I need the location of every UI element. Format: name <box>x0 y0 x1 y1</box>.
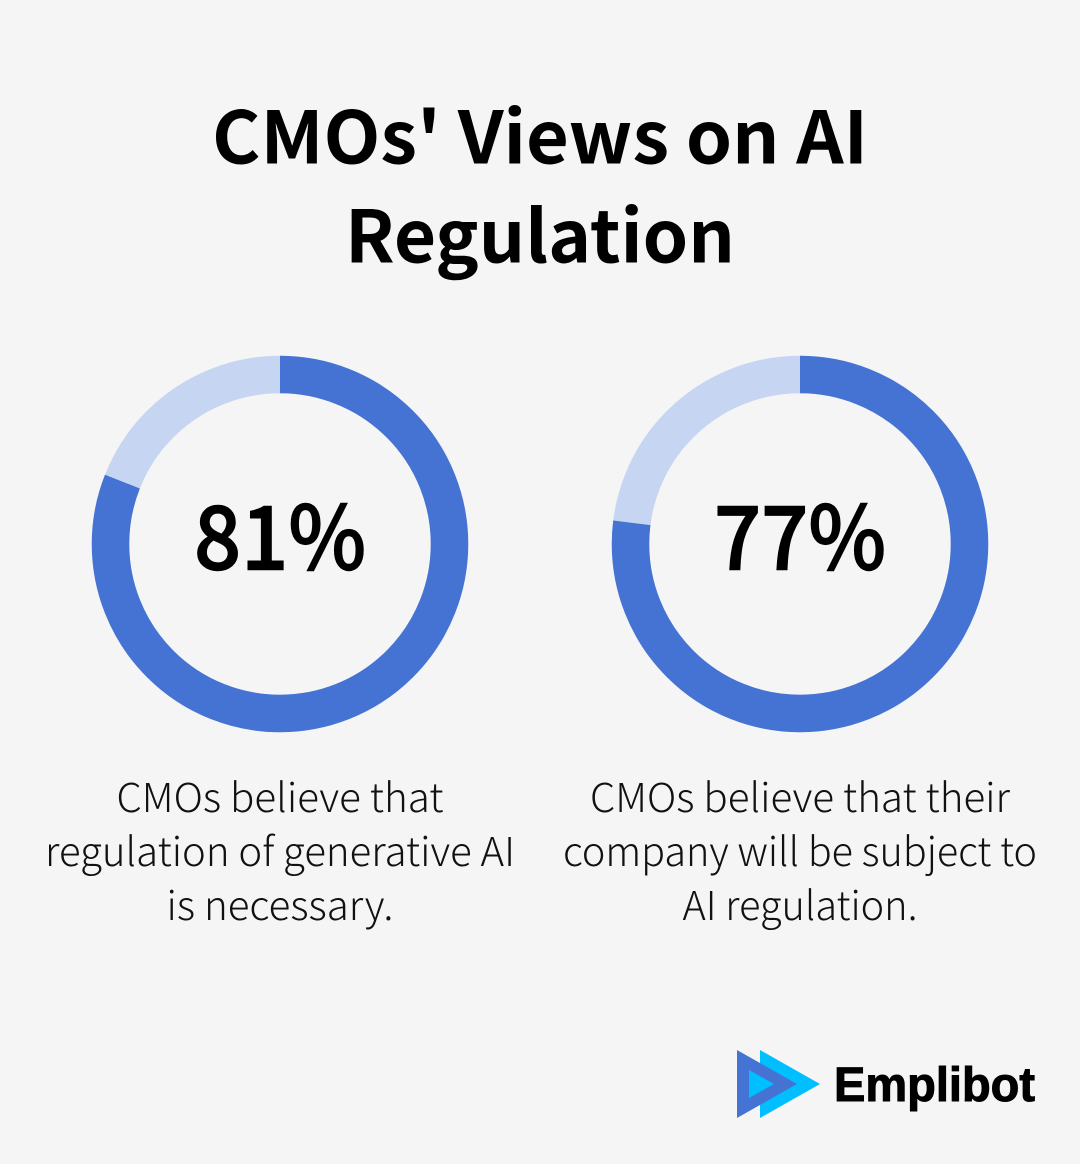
description: 81%: regulation of generative AI <box>45 820 515 878</box>
donut chart: 77% <box>630 374 970 714</box>
value: 81%: 81% <box>194 468 366 596</box>
description: 81%: CMOs believe that <box>116 766 444 824</box>
panel: 81 percent <box>45 374 515 932</box>
panel: 77 percent <box>563 374 1037 932</box>
description: 77%: AI regulation. <box>682 874 918 932</box>
title: CMOs' Views on AI <box>212 80 868 184</box>
icon: play triangles <box>737 1050 820 1118</box>
description: 77%: company will be subject to <box>563 820 1037 878</box>
description: 77% <box>563 766 1037 932</box>
description: 81%: is necessary. <box>166 874 394 932</box>
title <box>212 80 868 284</box>
description: 77%: CMOs believe that their <box>590 766 1011 824</box>
logo: Emplibot <box>737 1050 1035 1118</box>
value: 77%: 77% <box>714 468 886 596</box>
title: Regulation <box>345 178 735 284</box>
description: 81% <box>45 766 515 932</box>
donut chart: 81% <box>110 374 450 714</box>
wordmark: Emplibot <box>834 1059 1035 1112</box>
